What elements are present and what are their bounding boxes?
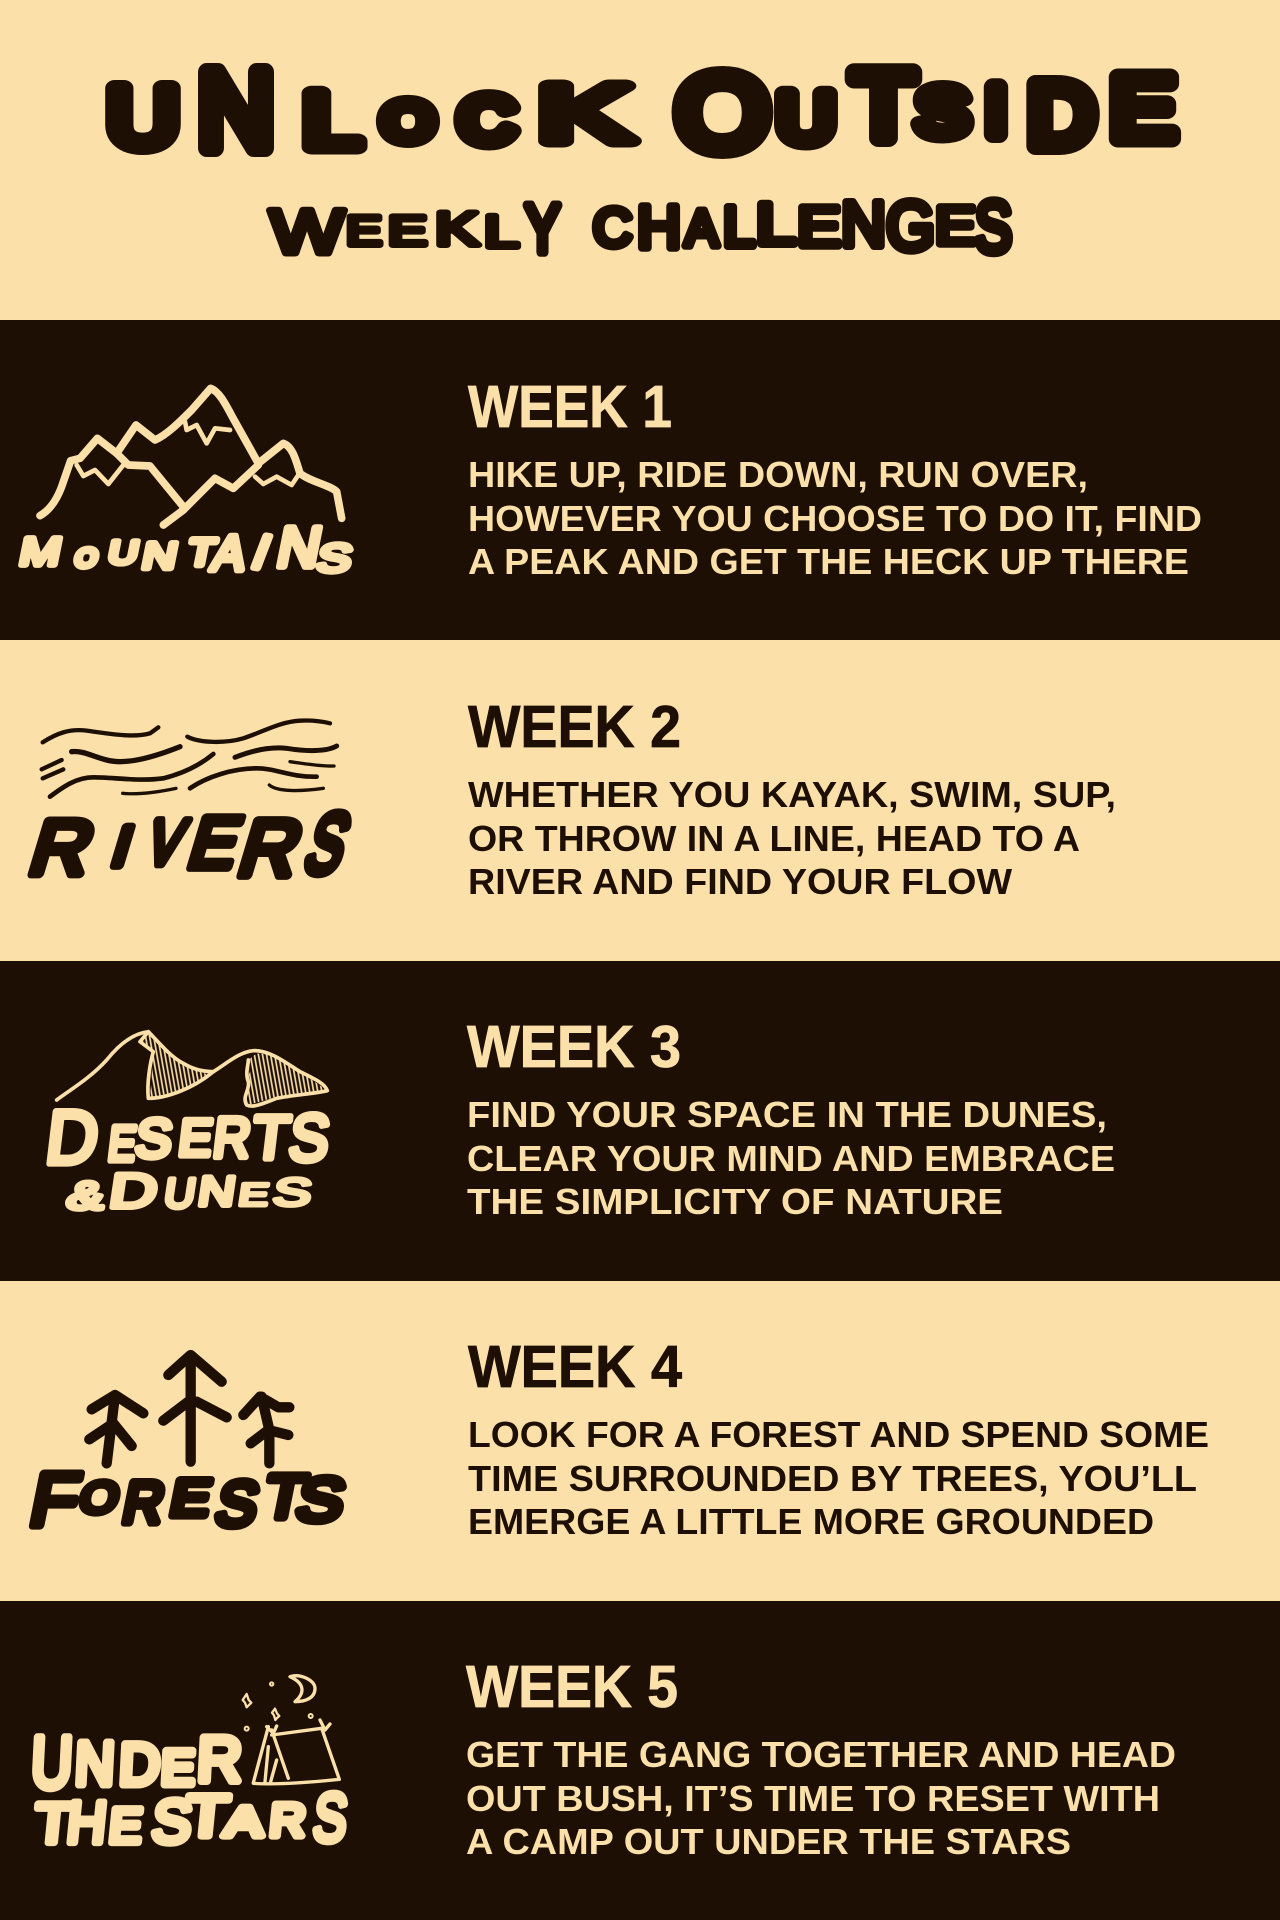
subtitle: C [593, 198, 632, 258]
title: E [1110, 59, 1176, 159]
label: Under: U [29, 1723, 75, 1804]
label: Mountains: N [272, 516, 327, 580]
description: week 5 [466, 1734, 1176, 1862]
label: and Dunes: U [161, 1170, 199, 1216]
title: I [986, 73, 1006, 149]
title: U [777, 79, 835, 157]
subtitle: Y [525, 191, 560, 267]
description: week 5: OUT BUSH, IT’S TIME TO RESET WITH [466, 1778, 1160, 1819]
label: Mountains: A [208, 525, 252, 581]
label: Under: E [160, 1741, 196, 1795]
label: Deserts: T [248, 1104, 293, 1173]
label: Rivers: R [20, 804, 105, 891]
label: Deserts: R [210, 1107, 254, 1170]
label: Rivers: I [105, 816, 140, 878]
subtitle: K [435, 202, 479, 255]
label: Forests: O [76, 1474, 123, 1522]
panel: week 5 under the stars [0, 1601, 1280, 1920]
description: week 2 [468, 774, 1116, 902]
subtitle: A [685, 200, 718, 257]
label: Forests: S [210, 1468, 265, 1540]
description: week 4: LOOK FOR A FOREST AND SPEND SOME [468, 1414, 1209, 1455]
subtitle: H [637, 194, 681, 261]
label: and Dunes: N [195, 1168, 239, 1215]
description: week 1: A PEAK AND GET THE HECK UP THERE [468, 541, 1189, 582]
title: K [538, 69, 632, 158]
panel: week 2 rivers [0, 640, 1280, 961]
label: and Dunes: E [236, 1177, 271, 1213]
label: Under: N [73, 1729, 116, 1797]
subtitle: L [723, 195, 755, 259]
label: Forests: T [258, 1463, 311, 1531]
subtitle: L [484, 206, 519, 257]
header panel [0, 0, 1280, 320]
label: The Stars: S [310, 1779, 351, 1856]
description: week 5: GET THE GANG TOGETHER AND HEAD [466, 1734, 1176, 1775]
title: U [107, 70, 179, 164]
subtitle: S [975, 188, 1012, 268]
description: week 3 [467, 1094, 1115, 1222]
heading: week 5: WEEK 5 [466, 1654, 678, 1720]
label: Deserts: D [42, 1096, 103, 1181]
description: week 3: THE SIMPLICITY OF NATURE [467, 1181, 1003, 1222]
label: Deserts: E [176, 1109, 216, 1166]
label: and Dunes: S [270, 1172, 315, 1215]
label: Mountains: U [105, 534, 142, 570]
label: The Stars: T [182, 1784, 232, 1849]
heading: week 2: WEEK 2 [468, 694, 681, 760]
title: D [1028, 66, 1095, 166]
panel: week 1 mountains [0, 320, 1280, 640]
label: Forests: S [291, 1466, 351, 1535]
icon: trees [23, 1355, 352, 1542]
description: week 2: OR THROW IN A LINE, HEAD TO A [468, 818, 1080, 859]
label: Mountains: T [185, 531, 219, 573]
description: week 1: HOWEVER YOU CHOOSE TO DO IT, FIND [468, 498, 1202, 539]
subtitle: N [841, 188, 886, 260]
label: The Stars: S [149, 1788, 195, 1856]
label: Forests: E [166, 1469, 216, 1527]
heading: week 4: WEEK 4 [468, 1334, 682, 1400]
subtitle: E [388, 207, 427, 254]
label: The Stars: T [32, 1792, 75, 1855]
label: Deserts: S [132, 1108, 176, 1169]
heading: week 1: WEEK 1 [468, 374, 672, 440]
description: week 3: CLEAR YOUR MIND AND EMBRACE [467, 1138, 1115, 1179]
title: L [303, 76, 361, 164]
label: Mountains: O [73, 545, 100, 573]
label: Rivers: S [295, 797, 360, 891]
title: T [852, 52, 915, 159]
label: Mountains: S [313, 537, 356, 581]
icon: tent, moon and stars [29, 1676, 351, 1856]
label: and Dunes: D [106, 1165, 161, 1218]
icon: dunes [42, 1032, 334, 1218]
heading: week 3: WEEK 3 [467, 1014, 681, 1080]
title: S [916, 75, 969, 150]
label: Rivers: R [229, 804, 313, 893]
description: week 4: TIME SURROUNDED BY TREES, YOU’LL [468, 1458, 1197, 1499]
label: Rivers: V [139, 806, 194, 878]
label: The Stars: R [267, 1794, 308, 1846]
title: C [459, 84, 515, 156]
subtitle: L [756, 192, 796, 257]
label: Mountains: I [245, 525, 278, 579]
panel: week 3 deserts and dunes [0, 961, 1280, 1281]
panel: week 4 forests [0, 1281, 1280, 1601]
label: Forests: R [118, 1469, 170, 1535]
title: O [676, 54, 769, 172]
subtitle: W [270, 198, 345, 267]
label: The Stars: H [64, 1791, 110, 1856]
title: N [198, 49, 274, 172]
subtitle: E [935, 196, 976, 256]
icon: mountains [14, 388, 360, 581]
subtitle: E [346, 207, 382, 254]
label: The Stars: A [223, 1798, 265, 1845]
icon: rivers [20, 721, 360, 893]
description: week 1 [468, 454, 1202, 582]
description: week 5: A CAMP OUT UNDER THE STARS [466, 1821, 1071, 1862]
label: Under: R [196, 1725, 244, 1795]
label: Mountains: N [139, 535, 181, 576]
description: week 1: HIKE UP, RIDE DOWN, RUN OVER, [468, 454, 1088, 495]
description: week 4: EMERGE A LITTLE MORE GROUNDED [468, 1501, 1154, 1542]
label: Forests: F [23, 1458, 87, 1542]
label: and Dunes: & [64, 1175, 107, 1218]
label: Mountains: M [16, 530, 65, 574]
label: The Stars: E [107, 1800, 145, 1854]
label: Deserts: E [105, 1116, 139, 1171]
label: Rivers: E [180, 802, 251, 883]
description: week 3: FIND YOUR SPACE IN THE DUNES, [467, 1094, 1107, 1135]
subtitle: E [797, 195, 841, 259]
label: Deserts: S [285, 1102, 334, 1175]
title: O [382, 92, 434, 152]
description: week 2: RIVER AND FIND YOUR FLOW [468, 861, 1012, 902]
label: Under: D [118, 1732, 162, 1797]
description: week 2: WHETHER YOU KAYAK, SWIM, SUP, [468, 774, 1116, 815]
description: week 4 [468, 1414, 1209, 1542]
subtitle: G [886, 187, 935, 265]
